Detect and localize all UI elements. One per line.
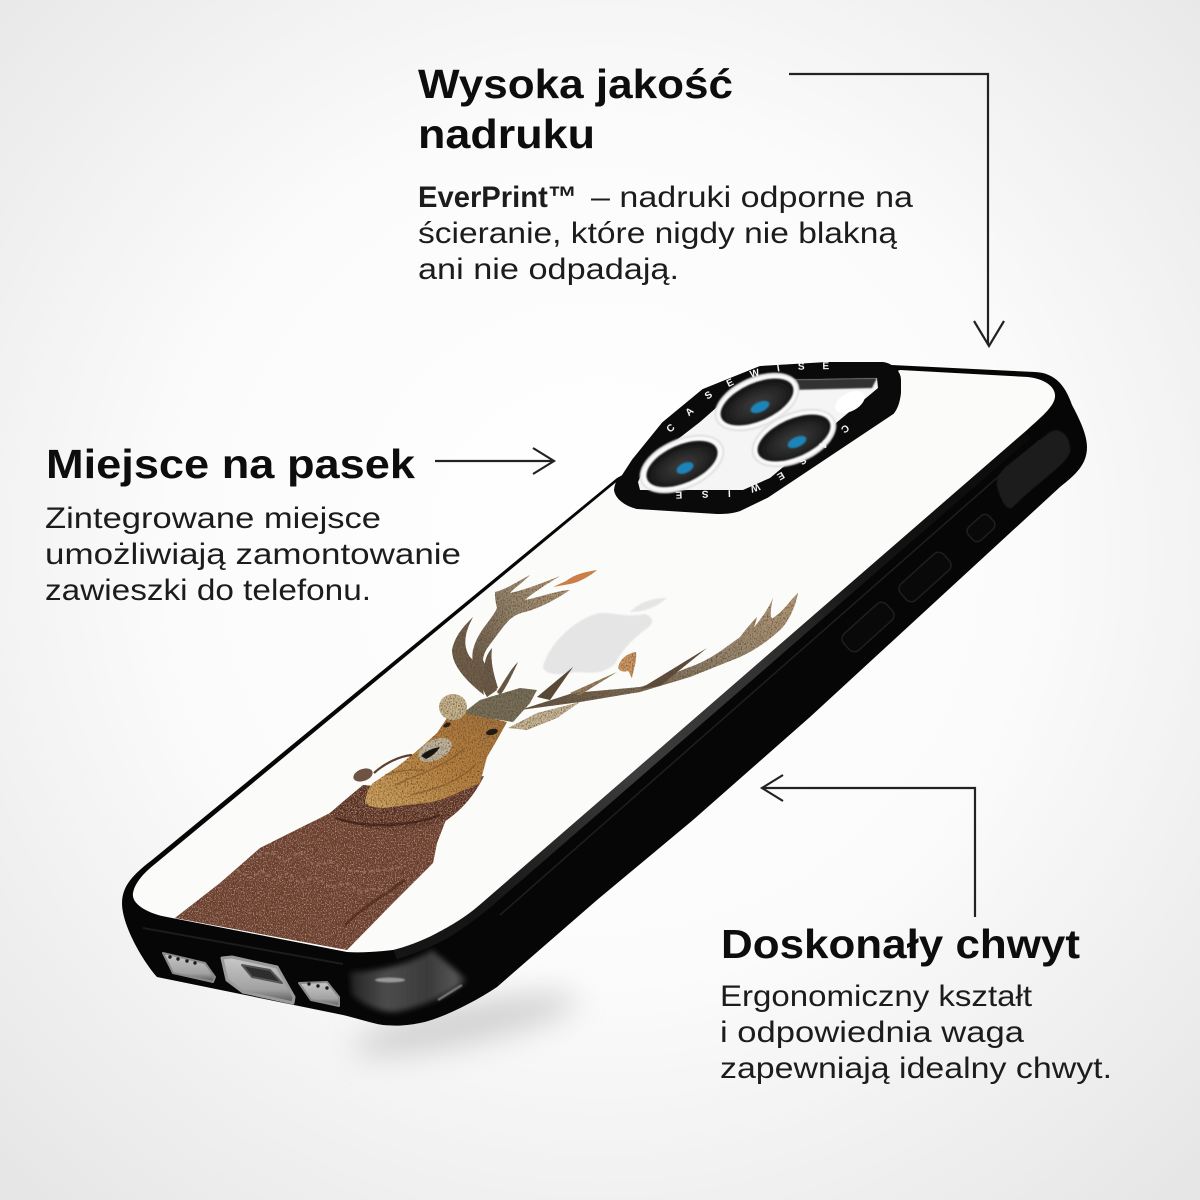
cap pompom xyxy=(439,694,467,720)
right antler xyxy=(520,593,798,710)
callout: print quality xyxy=(418,61,913,286)
lens right xyxy=(744,398,844,478)
gloss highlight xyxy=(375,978,405,982)
body text: EverPrint™ xyxy=(418,181,577,214)
back panel xyxy=(133,370,1055,952)
case body xyxy=(122,362,1087,1026)
callout: strap slot xyxy=(45,441,461,607)
lens top xyxy=(707,362,807,442)
phone shadow xyxy=(348,981,582,1067)
arrow: to top of case xyxy=(789,74,1004,346)
body text xyxy=(720,980,1112,1085)
speaker grille left xyxy=(163,953,215,982)
side button large xyxy=(839,599,897,655)
side highlight xyxy=(395,434,1027,954)
collar fold xyxy=(335,815,440,825)
arrow: to phone side xyxy=(762,775,975,917)
heading xyxy=(418,61,733,157)
deer muzzle xyxy=(414,733,456,767)
callout: perfect grip xyxy=(720,921,1112,1085)
body text: Ergonomiczny kształt xyxy=(720,980,1033,1013)
gloss strip xyxy=(438,985,462,1000)
sweater pattern bands xyxy=(237,852,405,895)
camera module xyxy=(614,362,901,514)
bird on antler xyxy=(618,652,636,678)
body text: ani nie odpadają. xyxy=(418,253,679,286)
speaker grille right xyxy=(299,982,339,1006)
body text: ścieranie, które nigdy nie blakną xyxy=(418,217,897,250)
sweater fold shadow xyxy=(345,880,405,925)
body text xyxy=(45,502,461,607)
camera glass xyxy=(638,378,878,490)
bottom corner gloss xyxy=(350,950,467,1012)
camera ring text top: CASEWISE xyxy=(667,362,829,432)
mute switch panel xyxy=(997,430,1070,508)
right ear xyxy=(508,702,580,730)
camera ring text bottom: CASEWISE xyxy=(676,425,849,499)
deer nose xyxy=(421,747,440,759)
bird on tip xyxy=(553,570,597,587)
camera ring xyxy=(615,363,900,513)
lens left xyxy=(632,424,732,504)
arrow: to strap slot xyxy=(435,448,554,474)
heading: nadruku xyxy=(418,111,595,157)
body text: zawieszki do telefonu. xyxy=(45,574,371,607)
left antler xyxy=(452,575,570,697)
apple logo xyxy=(543,598,667,674)
sweater xyxy=(175,793,447,950)
side button medium xyxy=(896,549,954,605)
body text: Zintegrowane miejsce xyxy=(45,502,381,535)
sweater collar xyxy=(330,776,484,830)
body text: i odpowiednia waga xyxy=(720,1016,1024,1049)
flash xyxy=(832,387,868,417)
heading: Wysoka jakość xyxy=(418,61,733,107)
pipe xyxy=(352,755,412,784)
body text: umożliwiają zamontowanie xyxy=(45,538,461,571)
deer head and neck xyxy=(365,713,507,808)
deer far eye xyxy=(443,721,451,729)
side button small xyxy=(965,512,997,544)
phone case xyxy=(122,362,1087,1026)
ring inner shade xyxy=(733,378,877,393)
bottom rim groove xyxy=(143,928,343,964)
body text: zapewniają idealny chwyt. xyxy=(720,1052,1112,1085)
charging port xyxy=(222,957,294,1003)
body text xyxy=(418,181,913,286)
side groove xyxy=(500,440,1040,915)
heading: Doskonały chwyt xyxy=(721,921,1080,967)
cap xyxy=(463,688,537,722)
body text: – nadruki odporne na xyxy=(591,181,913,214)
fur shading xyxy=(385,748,475,795)
heading: Miejsce na pasek xyxy=(46,441,415,487)
deer eye xyxy=(485,728,499,736)
deer illustration xyxy=(175,570,798,950)
